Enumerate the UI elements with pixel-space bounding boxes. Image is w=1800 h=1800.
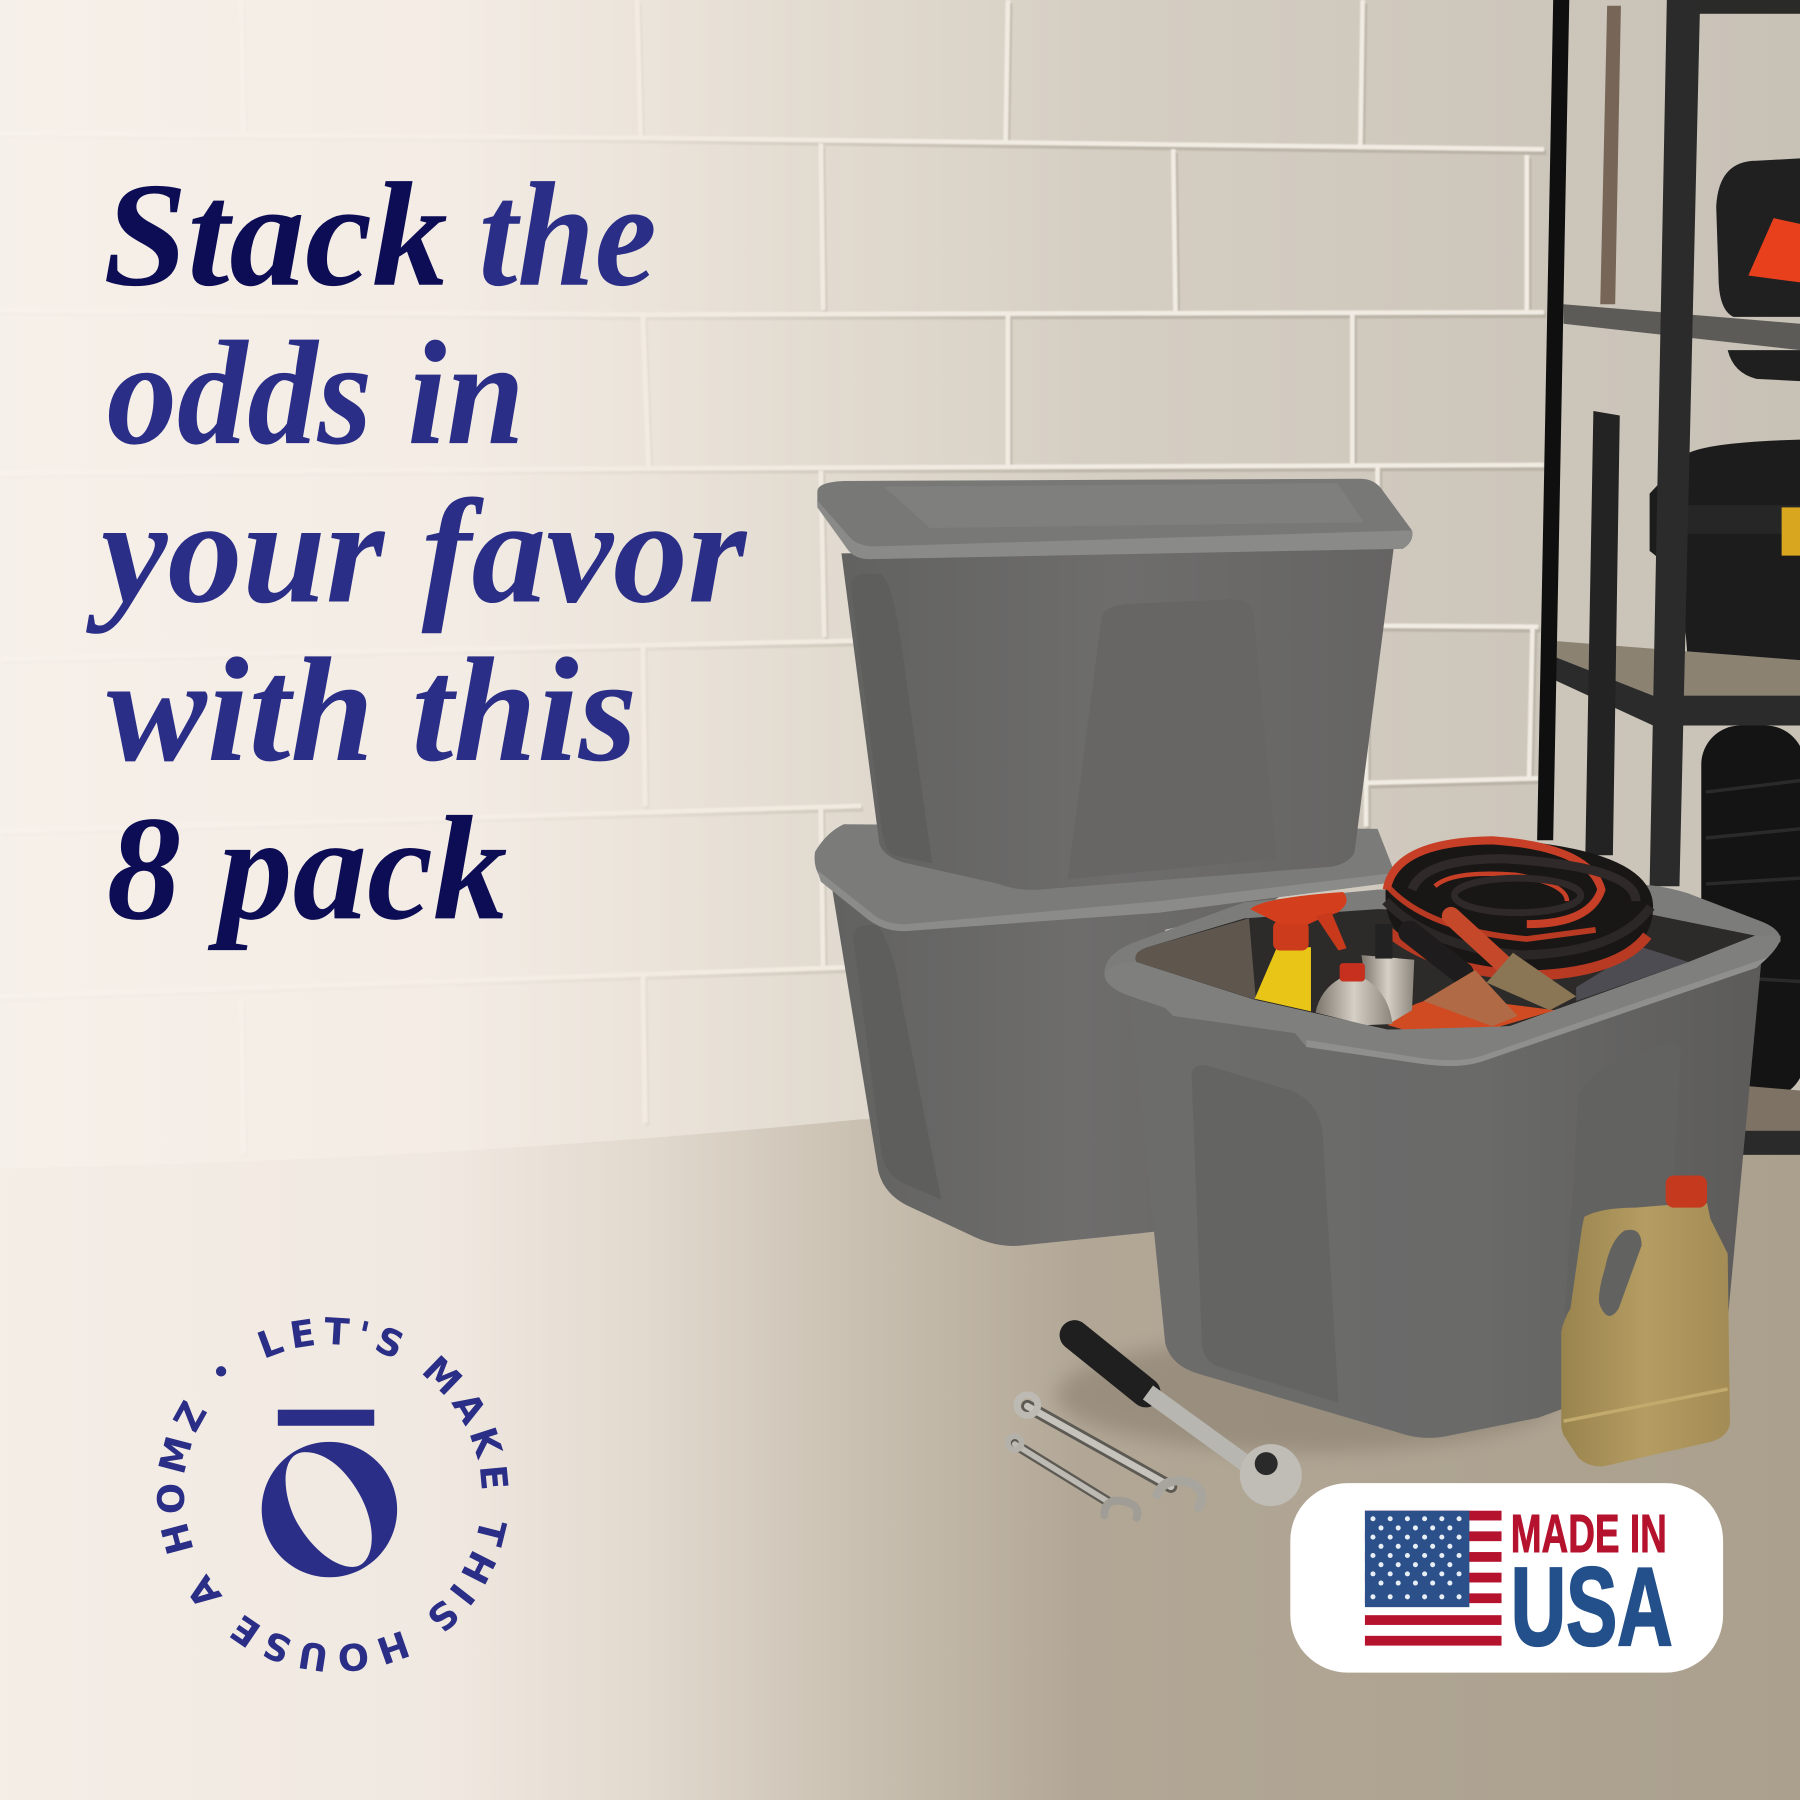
lower shelf board (1733, 1085, 1800, 1131)
jug body with handle hole (1561, 1203, 1730, 1466)
middle shelf board (1549, 641, 1800, 726)
small wrench (1008, 1436, 1138, 1518)
black clamp handle (1410, 932, 1462, 973)
storage shelf (1537, 0, 1800, 1155)
top bin side recess (851, 574, 932, 863)
box shadow on floor (1056, 1337, 1561, 1452)
made in usa badge (1290, 1483, 1723, 1673)
jug base ridge (1564, 1389, 1728, 1421)
shelf tire (1701, 726, 1800, 1099)
front bin right recess (1561, 1044, 1681, 1378)
copper clamps (1423, 970, 1518, 1026)
red clamp cable sleeve (1451, 916, 1506, 967)
jug red cap (1666, 1176, 1707, 1208)
top storage bin (817, 479, 1412, 890)
brown back upright (1600, 6, 1621, 304)
usa label: USA (1511, 1544, 1673, 1669)
hand tools (1008, 1335, 1302, 1518)
front bin rim front (1104, 936, 1781, 1066)
large wrench (1017, 1395, 1202, 1507)
garage wall (0, 0, 1800, 1182)
badge background (1290, 1483, 1723, 1673)
coiled jumper cables (1386, 840, 1653, 978)
garage floor (0, 1119, 1800, 1800)
top bin lid (817, 479, 1412, 559)
line: odds in: odds in (107, 311, 525, 476)
brick mortar lines (0, 0, 1546, 1157)
made in label: MADE IN (1511, 1504, 1667, 1564)
word: the: the (479, 153, 657, 318)
upper shelf board (1564, 304, 1800, 350)
front open storage bin (1104, 840, 1781, 1438)
shelf toolbox (1650, 440, 1800, 666)
middle bin side recess (853, 925, 941, 1200)
logo circular slogan: LET'S MAKE THIS HOUSE A HOMZ (156, 1317, 508, 1672)
line: 8 pack: 8 pack (107, 786, 507, 951)
logo ring letter o (262, 1442, 397, 1577)
circular brand logo (156, 1317, 508, 1672)
front bin left recess (1192, 1065, 1339, 1403)
shelf bag with orange cone (1716, 158, 1800, 317)
top shelf edge (1699, 0, 1800, 14)
line: with this: with this (107, 628, 637, 793)
word: stack: Stack (103, 153, 448, 318)
usa flag (1365, 1511, 1502, 1646)
aerosol cans (1316, 924, 1414, 1025)
headline (86, 153, 748, 951)
middle bin body (832, 872, 1320, 1246)
red cloth (1388, 996, 1555, 1032)
front bin body (1131, 953, 1762, 1438)
bin rim back and right side (1104, 885, 1781, 1010)
middle storage bin (815, 824, 1398, 1246)
shelf posts (1537, 0, 1569, 840)
grey towel (1576, 947, 1689, 1001)
oil jug (1561, 1176, 1730, 1466)
bin interior (1135, 909, 1755, 1030)
ratchet (1074, 1335, 1302, 1506)
top bin front recess (1068, 599, 1277, 879)
middle bin lid (815, 824, 1398, 931)
line: your favor: your favor (86, 470, 748, 635)
top bin body (841, 549, 1394, 890)
logo bar (278, 1410, 374, 1426)
spray bottle (1250, 892, 1347, 1011)
